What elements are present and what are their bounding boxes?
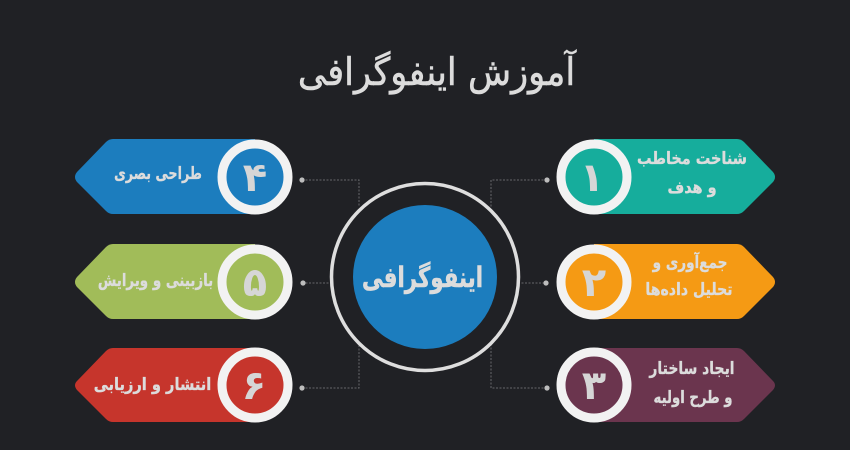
step 5 banner: بازبینی و ویرایش <box>98 270 213 290</box>
connector lines <box>302 180 547 388</box>
step 2 banner <box>561 244 775 319</box>
step 6 banner <box>75 348 288 422</box>
central hub: اینفوگرافی <box>362 261 483 295</box>
step 1 banner: شناخت مخاطب <box>637 148 747 168</box>
step 5 banner: ۵ <box>243 260 267 306</box>
step 3 banner: ۳ <box>582 363 606 409</box>
step 2 banner: ۲ <box>582 260 606 306</box>
step 6 banner: ۶ <box>242 363 266 409</box>
step 3 banner: ایجاد ساختار <box>649 359 735 378</box>
connector dots <box>299 177 550 391</box>
title: آموزش اینفوگرافی <box>298 49 577 94</box>
step 3 banner <box>561 348 775 422</box>
step 5 banner <box>75 244 288 319</box>
step 2 banner: تحلیل داده‌ها <box>645 280 733 299</box>
step 4 banner: طراحی بصری <box>114 163 202 184</box>
step 1 banner <box>561 139 775 214</box>
step 4 banner: ۴ <box>243 155 267 201</box>
step 2 banner: جمع‌آوری و <box>652 251 727 272</box>
step 3 banner: و طرح اولیه <box>654 387 732 407</box>
step 1 banner: ۱ <box>580 155 604 201</box>
central hub <box>332 184 518 370</box>
step 1 banner: و هدف <box>667 177 717 197</box>
step 6 banner: انتشار و ارزیابی <box>94 374 211 394</box>
step 4 banner <box>75 139 288 214</box>
